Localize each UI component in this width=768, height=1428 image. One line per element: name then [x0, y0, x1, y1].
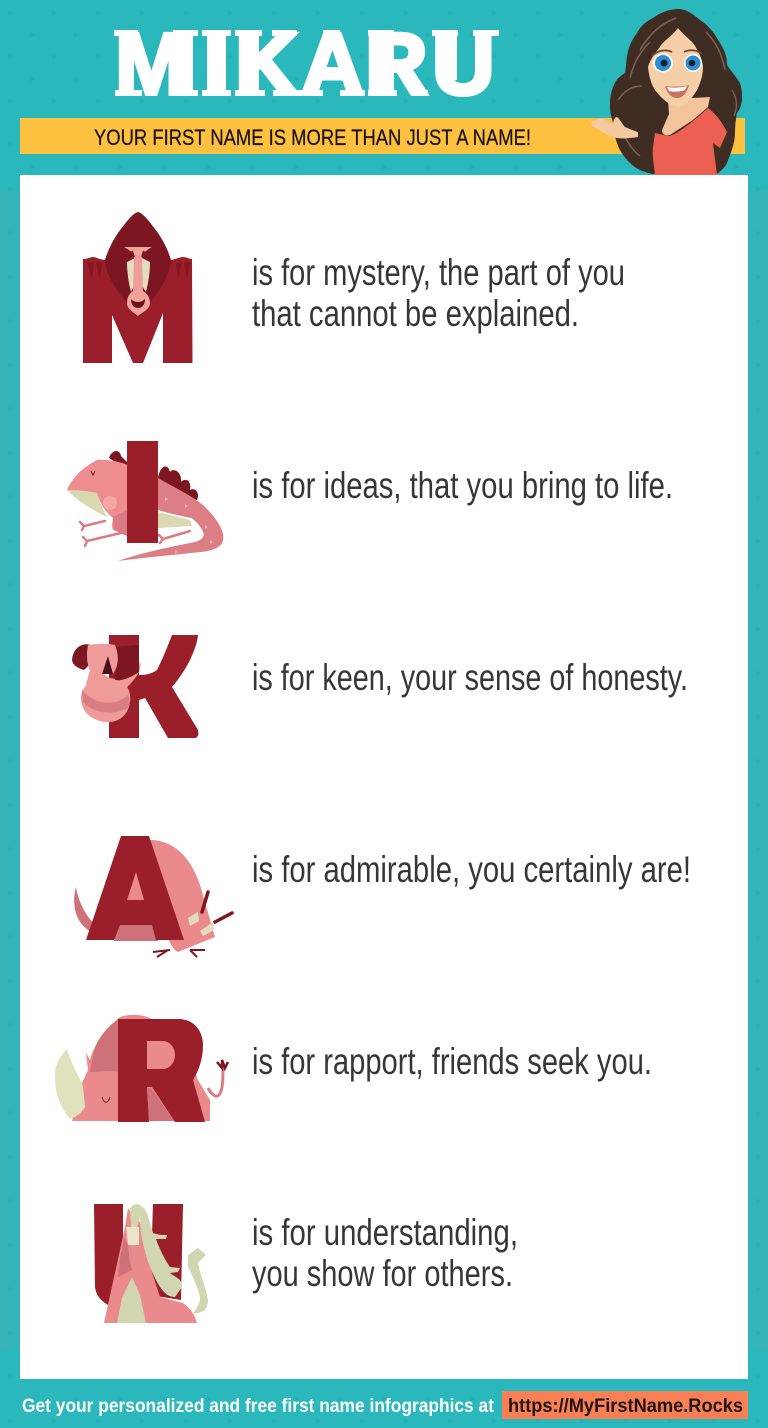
row: M is for mystery [83, 212, 625, 363]
row: K is for keen [72, 635, 688, 738]
icon: letter U unicorn [94, 1204, 208, 1323]
row: R is for rapport [55, 1015, 652, 1122]
icon: letter I iguana [67, 441, 223, 561]
footer url badge: https://MyFirstName.Rocks [508, 1396, 743, 1417]
icon: cartoon woman presenter [590, 9, 742, 175]
footer call to action: Get your personalized and free first name infographics at [22, 1396, 495, 1417]
panel: white content card [20, 175, 748, 1379]
row: U is for understanding [94, 1204, 518, 1323]
row: I is for ideas [67, 441, 673, 561]
subtitle banner [20, 118, 745, 154]
icon: letter A armadillo [74, 836, 232, 957]
subtitle banner: YOUR FIRST NAME IS MORE THAN JUST A NAME! [94, 125, 531, 150]
row: A is for admirable [74, 836, 691, 957]
text: U line two: you show for others. [252, 1253, 513, 1294]
text: M line two: that cannot be explained. [252, 293, 579, 334]
text: M line: is for mystery, the part of you [252, 252, 625, 293]
text: R line: is for rapport, friends seek you. [252, 1041, 652, 1082]
icon: letter R rhino [55, 1015, 228, 1122]
icon: letter K koala [72, 635, 198, 738]
title: MIKARU [115, 16, 495, 113]
icon: letter M mandrill [83, 212, 192, 363]
text: U line: is for understanding, [252, 1212, 518, 1253]
